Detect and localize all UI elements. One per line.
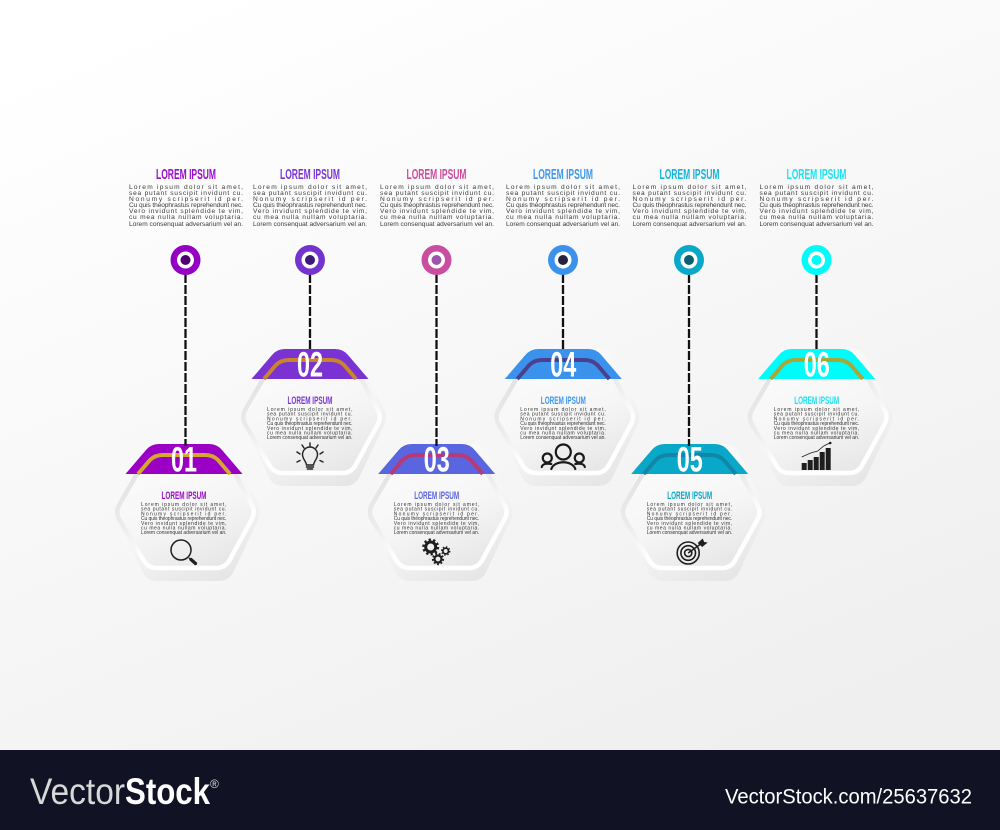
card text 2: Lorem ipsum dolor sit amet, bbox=[267, 407, 353, 413]
body text 6: sea putant suscipit invidunt cu. bbox=[760, 190, 874, 197]
card 3 bbox=[369, 440, 512, 581]
card text 1: Vero invidunt splendide te vim, bbox=[141, 521, 226, 527]
body text 2: Lorem ipsum dolor sit amet, bbox=[253, 184, 367, 191]
body text 4: Lorem ipsum dolor sit amet, bbox=[506, 184, 620, 191]
card text 3: Cu quis theophrastus reprehendunt nec. bbox=[394, 516, 479, 522]
card text 6: Lorem ipsum dolor sit amet, bbox=[774, 407, 859, 413]
body text 2: Vero invidunt splendide te vim, bbox=[253, 208, 367, 215]
card text 2: Cu quis theophrastus reprehendunt nec. bbox=[267, 421, 352, 427]
heading 2: LOREM IPSUM bbox=[280, 167, 340, 183]
connector line 3 bbox=[435, 274, 438, 446]
marker 6 bbox=[802, 245, 832, 275]
card text 3 bbox=[394, 502, 479, 536]
body text 5: Nonumy scripserit id per. bbox=[632, 196, 747, 203]
number tab 5 bbox=[631, 444, 748, 474]
body text 2: Nonumy scripserit id per. bbox=[253, 196, 367, 203]
card text 4: cu mea nulla nullam voluptaria. bbox=[520, 430, 606, 436]
body text 3: sea putant suscipit invidunt cu. bbox=[380, 190, 494, 197]
number tab 4 bbox=[505, 349, 622, 379]
card text 6 bbox=[774, 407, 859, 441]
card text 4: Lorem consenquat adversarium vel an. bbox=[520, 435, 606, 441]
card heading 1: LOREM IPSUM bbox=[162, 490, 206, 502]
body text 4: Nonumy scripserit id per. bbox=[506, 196, 620, 203]
number tab 6 bbox=[758, 349, 875, 379]
card text 2: Vero invidunt splendide te vim, bbox=[267, 426, 352, 432]
card text 4: Nonumy scripserit id per. bbox=[520, 416, 606, 422]
tab band 6 bbox=[771, 360, 863, 379]
card text 1: Lorem ipsum dolor sit amet, bbox=[141, 502, 227, 508]
heading 6: LOREM IPSUM bbox=[786, 167, 846, 183]
number 04: 04 bbox=[550, 346, 577, 384]
card heading 6: LOREM IPSUM bbox=[794, 395, 839, 407]
card text 5: Lorem ipsum dolor sit amet, bbox=[647, 502, 732, 508]
card text 5: sea putant suscipit invidunt cu. bbox=[647, 507, 732, 513]
body text 6: Cu quis theophrastus reprehendunt nec. bbox=[760, 202, 874, 209]
card text 3: cu mea nulla nullam voluptaria. bbox=[394, 526, 479, 532]
card text 6: sea putant suscipit invidunt cu. bbox=[774, 412, 859, 418]
footer bar bbox=[0, 750, 1000, 830]
card 5 bbox=[622, 440, 766, 581]
card text 3: Nonumy scripserit id per. bbox=[394, 511, 479, 517]
body text 3: cu mea nulla nullam voluptaria. bbox=[380, 214, 494, 221]
body text 1: sea putant suscipit invidunt cu. bbox=[129, 190, 243, 197]
card heading 5: LOREM IPSUM bbox=[667, 490, 712, 502]
icon: gears bbox=[423, 540, 450, 564]
body text 6: Vero invidunt splendide te vim, bbox=[760, 208, 874, 215]
hexagon panel 1 bbox=[116, 444, 260, 581]
number tab 2 bbox=[252, 349, 368, 379]
body text 1: Cu quis theophrastus reprehendunt nec. bbox=[129, 202, 243, 209]
icon: target with arrow bbox=[677, 538, 708, 564]
body text 3: Vero invidunt splendide te vim, bbox=[380, 208, 494, 215]
body text 2: sea putant suscipit invidunt cu. bbox=[253, 190, 367, 197]
heading 4: LOREM IPSUM bbox=[533, 167, 593, 183]
heading 1: LOREM IPSUM bbox=[156, 167, 216, 183]
card text 6: Lorem consenquat adversarium vel an. bbox=[774, 435, 859, 441]
card text 6: Vero invidunt splendide te vim, bbox=[774, 426, 859, 432]
body text 5: sea putant suscipit invidunt cu. bbox=[632, 190, 747, 197]
card heading 4: LOREM IPSUM bbox=[541, 395, 586, 407]
card text 5: Cu quis theophrastus reprehendunt nec. bbox=[647, 516, 732, 522]
icon: light bulb bbox=[297, 443, 323, 469]
card text 3: sea putant suscipit invidunt cu. bbox=[394, 507, 479, 513]
hexagon panel 4 bbox=[496, 349, 639, 486]
card 1 bbox=[116, 440, 260, 581]
card 6 bbox=[749, 346, 892, 486]
body text 5: Lorem consenquat adversarium vel an. bbox=[632, 221, 747, 228]
card text 5: Lorem consenquat adversarium vel an. bbox=[647, 530, 732, 536]
card text 2: cu mea nulla nullam voluptaria. bbox=[267, 430, 352, 436]
heading 3: LOREM IPSUM bbox=[406, 167, 466, 183]
marker 2 bbox=[295, 245, 325, 275]
connector line 4 bbox=[562, 274, 564, 351]
heading 5: LOREM IPSUM bbox=[660, 167, 720, 183]
number 02: 02 bbox=[297, 346, 323, 384]
card text 2: Nonumy scripserit id per. bbox=[267, 416, 352, 422]
card text 4 bbox=[520, 407, 606, 441]
marker 3 bbox=[422, 245, 452, 275]
card text 1: sea putant suscipit invidunt cu. bbox=[141, 507, 226, 513]
card text 1 bbox=[141, 502, 226, 536]
body text 5: Lorem ipsum dolor sit amet, bbox=[632, 184, 747, 191]
body text 1 bbox=[129, 184, 243, 228]
card text 1: Lorem consenquat adversarium vel an. bbox=[141, 530, 226, 536]
body text 2: cu mea nulla nullam voluptaria. bbox=[253, 214, 367, 221]
hexagon panel 3 bbox=[369, 444, 512, 581]
card text 4: sea putant suscipit invidunt cu. bbox=[520, 412, 606, 418]
body text 4: Lorem consenquat adversarium vel an. bbox=[506, 221, 620, 228]
body text 1: Lorem ipsum dolor sit amet, bbox=[129, 184, 243, 191]
body text 5 bbox=[632, 184, 747, 228]
body text 5: Cu quis theophrastus reprehendunt nec. bbox=[632, 202, 747, 209]
body text 4: cu mea nulla nullam voluptaria. bbox=[506, 214, 620, 221]
body text 5: cu mea nulla nullam voluptaria. bbox=[632, 214, 747, 221]
body text 6 bbox=[760, 184, 874, 228]
number tab 1 bbox=[126, 444, 242, 474]
icon: magnifying glass bbox=[171, 540, 196, 564]
connector line 2 bbox=[309, 274, 311, 351]
hexagon panel 6 bbox=[749, 349, 892, 486]
card 4 bbox=[496, 346, 639, 486]
card text 5: Vero invidunt splendide te vim, bbox=[647, 521, 732, 527]
number 03: 03 bbox=[424, 440, 450, 480]
number 01: 01 bbox=[171, 440, 197, 480]
body text 2 bbox=[253, 184, 367, 228]
number 05: 05 bbox=[677, 440, 703, 480]
body text 3 bbox=[380, 184, 494, 228]
card text 5: Nonumy scripserit id per. bbox=[647, 511, 732, 517]
card text 5 bbox=[647, 502, 732, 536]
top text column 4 bbox=[506, 167, 620, 228]
icon: rising bar chart bbox=[802, 442, 832, 470]
body text 4: Vero invidunt splendide te vim, bbox=[506, 208, 620, 215]
connector line 5 bbox=[688, 274, 690, 446]
top text column 6 bbox=[760, 167, 874, 228]
body text 6: Nonumy scripserit id per. bbox=[760, 196, 874, 203]
card text 4: Lorem ipsum dolor sit amet, bbox=[520, 407, 606, 413]
card text 1: cu mea nulla nullam voluptaria. bbox=[141, 526, 226, 532]
body text 3: Cu quis theophrastus reprehendunt nec. bbox=[380, 202, 494, 209]
body text 1: cu mea nulla nullam voluptaria. bbox=[129, 214, 243, 221]
number tab 3 bbox=[378, 444, 495, 474]
card text 2: Lorem consenquat adversarium vel an. bbox=[267, 435, 352, 441]
marker 4 bbox=[548, 245, 578, 275]
body text 5: Vero invidunt splendide te vim, bbox=[632, 208, 747, 215]
body text 6: cu mea nulla nullam voluptaria. bbox=[760, 214, 874, 221]
body text 3: Lorem ipsum dolor sit amet, bbox=[380, 184, 494, 191]
card text 6: Nonumy scripserit id per. bbox=[774, 416, 859, 422]
card text 4: Cu quis theophrastus reprehendunt nec. bbox=[520, 421, 606, 427]
card text 1: Cu quis theophrastus reprehendunt nec. bbox=[141, 516, 226, 522]
body text 1: Lorem consenquat adversarium vel an. bbox=[129, 221, 243, 228]
body text 1: Nonumy scripserit id per. bbox=[129, 196, 243, 203]
body text 4 bbox=[506, 184, 620, 228]
top text column 1 bbox=[129, 167, 243, 228]
tab band 5 bbox=[644, 455, 736, 474]
connector line 6 bbox=[815, 274, 818, 351]
body text 4: sea putant suscipit invidunt cu. bbox=[506, 190, 620, 197]
footer logo: Vector bbox=[30, 771, 125, 812]
card heading 3: LOREM IPSUM bbox=[414, 490, 459, 502]
icon: people group bbox=[542, 444, 585, 469]
body text 3: Nonumy scripserit id per. bbox=[380, 196, 494, 203]
footer logo bbox=[30, 771, 219, 812]
card text 3: Lorem consenquat adversarium vel an. bbox=[394, 530, 479, 536]
body text 4: Cu quis theophrastus reprehendunt nec. bbox=[506, 202, 620, 209]
card text 3: Vero invidunt splendide te vim, bbox=[394, 521, 479, 527]
card text 1: Nonumy scripserit id per. bbox=[141, 511, 226, 517]
body text 6: Lorem ipsum dolor sit amet, bbox=[760, 184, 874, 191]
connector line 1 bbox=[184, 274, 187, 446]
number 06: 06 bbox=[804, 346, 830, 384]
tab band 2 bbox=[264, 360, 356, 379]
footer logo: ® bbox=[210, 777, 219, 791]
body text 2: Lorem consenquat adversarium vel an. bbox=[253, 221, 367, 228]
card heading 2: LOREM IPSUM bbox=[288, 395, 332, 407]
marker 1 bbox=[170, 245, 200, 275]
card text 5: cu mea nulla nullam voluptaria. bbox=[647, 526, 732, 532]
tab band 4 bbox=[517, 360, 609, 379]
top text column 5 bbox=[632, 167, 747, 228]
footer logo: Stock bbox=[125, 771, 210, 812]
card text 2 bbox=[267, 407, 352, 441]
card 2 bbox=[242, 346, 386, 486]
card text 6: Cu quis theophrastus reprehendunt nec. bbox=[774, 421, 859, 427]
body text 1: Vero invidunt splendide te vim, bbox=[129, 208, 243, 215]
footer image id: VectorStock.com/25637632 bbox=[725, 786, 972, 808]
card text 3: Lorem ipsum dolor sit amet, bbox=[394, 502, 479, 508]
tab band 1 bbox=[138, 455, 230, 474]
card text 6: cu mea nulla nullam voluptaria. bbox=[774, 430, 859, 436]
hexagon panel 5 bbox=[622, 444, 766, 581]
body text 6: Lorem consenquat adversarium vel an. bbox=[760, 221, 874, 228]
marker 5 bbox=[674, 245, 704, 275]
top text column 2 bbox=[253, 167, 367, 228]
tab band 3 bbox=[391, 455, 483, 474]
hexagon panel 2 bbox=[242, 349, 386, 486]
card text 4: Vero invidunt splendide te vim, bbox=[520, 426, 606, 432]
body text 3: Lorem consenquat adversarium vel an. bbox=[380, 221, 494, 228]
card text 2: sea putant suscipit invidunt cu. bbox=[267, 412, 352, 418]
body text 2: Cu quis theophrastus reprehendunt nec. bbox=[253, 202, 367, 209]
top text column 3 bbox=[380, 167, 494, 228]
